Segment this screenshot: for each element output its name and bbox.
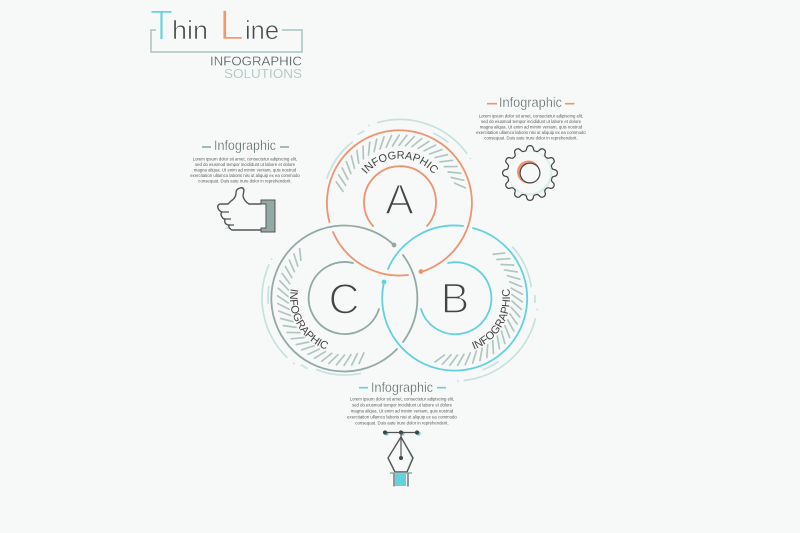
text block: left: magna aliqua. Ut enim ad minim veniam, quis nostrud	[194, 168, 297, 172]
text block: top right: Infographic	[499, 95, 562, 110]
curved label B: INFOGRAPHIC	[472, 289, 510, 350]
text block: left: exercitation ullamco laboris nisi ut aliquip ex ea commodo	[190, 173, 300, 178]
text block: top right: sed do eiusmod tempor incididunt ut labore et dolore	[481, 119, 582, 124]
circle C	[271, 225, 417, 371]
text block: left: sed do eiusmod tempor incididunt ut labore et dolore	[195, 162, 296, 167]
text block: left: Lorem ipsum dolor sit amet, consectetur adipiscing elit,	[193, 156, 297, 162]
icon: pen nib	[383, 430, 421, 486]
text block: left: consequat. Duis aute irure dolor in reprehenderit.	[198, 178, 292, 184]
icon: thumbs up	[218, 188, 275, 232]
text block: bottom: sed do eiusmod tempor incididunt ut labore et dolore	[352, 402, 453, 408]
letter B: B	[441, 275, 469, 323]
text block: left	[190, 138, 300, 184]
text block: bottom	[347, 380, 457, 426]
icon: gear	[503, 146, 557, 200]
text block: bottom: Lorem ipsum dolor sit amet, consectetur adipiscing elit,	[350, 396, 454, 402]
decoration: ring C arcs and hatching	[237, 242, 372, 403]
text block: top right: exercitation ullamco laboris nisi ut aliquip ex ea commodo	[476, 130, 586, 135]
text block: bottom: magna aliqua. Ut enim ad minim veniam, quis nostrud	[351, 408, 454, 414]
text block: top right: magna aliqua. Ut enim ad minim veniam, quis nostrud	[480, 124, 583, 130]
title: Thin Line Infographic Solutions: INFOGRAPHIC	[210, 54, 302, 68]
title: Thin Line Infographic Solutions: SOLUTIONS	[224, 66, 302, 81]
text block: top right: consequat. Duis aute irure dolor in reprehenderit.	[484, 136, 578, 140]
text block: bottom: exercitation ullamco laboris nisi ut aliquip ex ea commodo	[347, 414, 457, 420]
circle A	[327, 130, 472, 276]
decoration: ring B arcs and hatching	[429, 240, 563, 401]
letter A: A	[385, 176, 414, 224]
circle B	[382, 225, 527, 371]
title: Thin Line Infographic Solutions: T	[150, 2, 173, 50]
curved label C: INFOGRAPHIC	[290, 290, 328, 349]
title: Thin Line Infographic Solutions: L	[219, 2, 244, 50]
curved label A: INFOGRAPHIC	[361, 151, 438, 174]
decoration: ring A arcs and hatching	[327, 119, 471, 191]
text block: top right	[476, 95, 586, 140]
text block: top right: Lorem ipsum dolor sit amet, consectetur adipiscing elit,	[479, 114, 583, 118]
text block: left: Infographic	[214, 138, 276, 153]
title: Thin Line Infographic Solutions: ine	[245, 15, 279, 45]
letter C: C	[328, 276, 360, 324]
title: Thin Line Infographic Solutions: hin	[172, 15, 208, 45]
text block: bottom: Infographic	[371, 380, 433, 395]
text block: bottom: consequat. Duis aute irure dolor in reprehenderit.	[355, 420, 449, 426]
title: Thin Line Infographic Solutions	[150, 2, 302, 81]
